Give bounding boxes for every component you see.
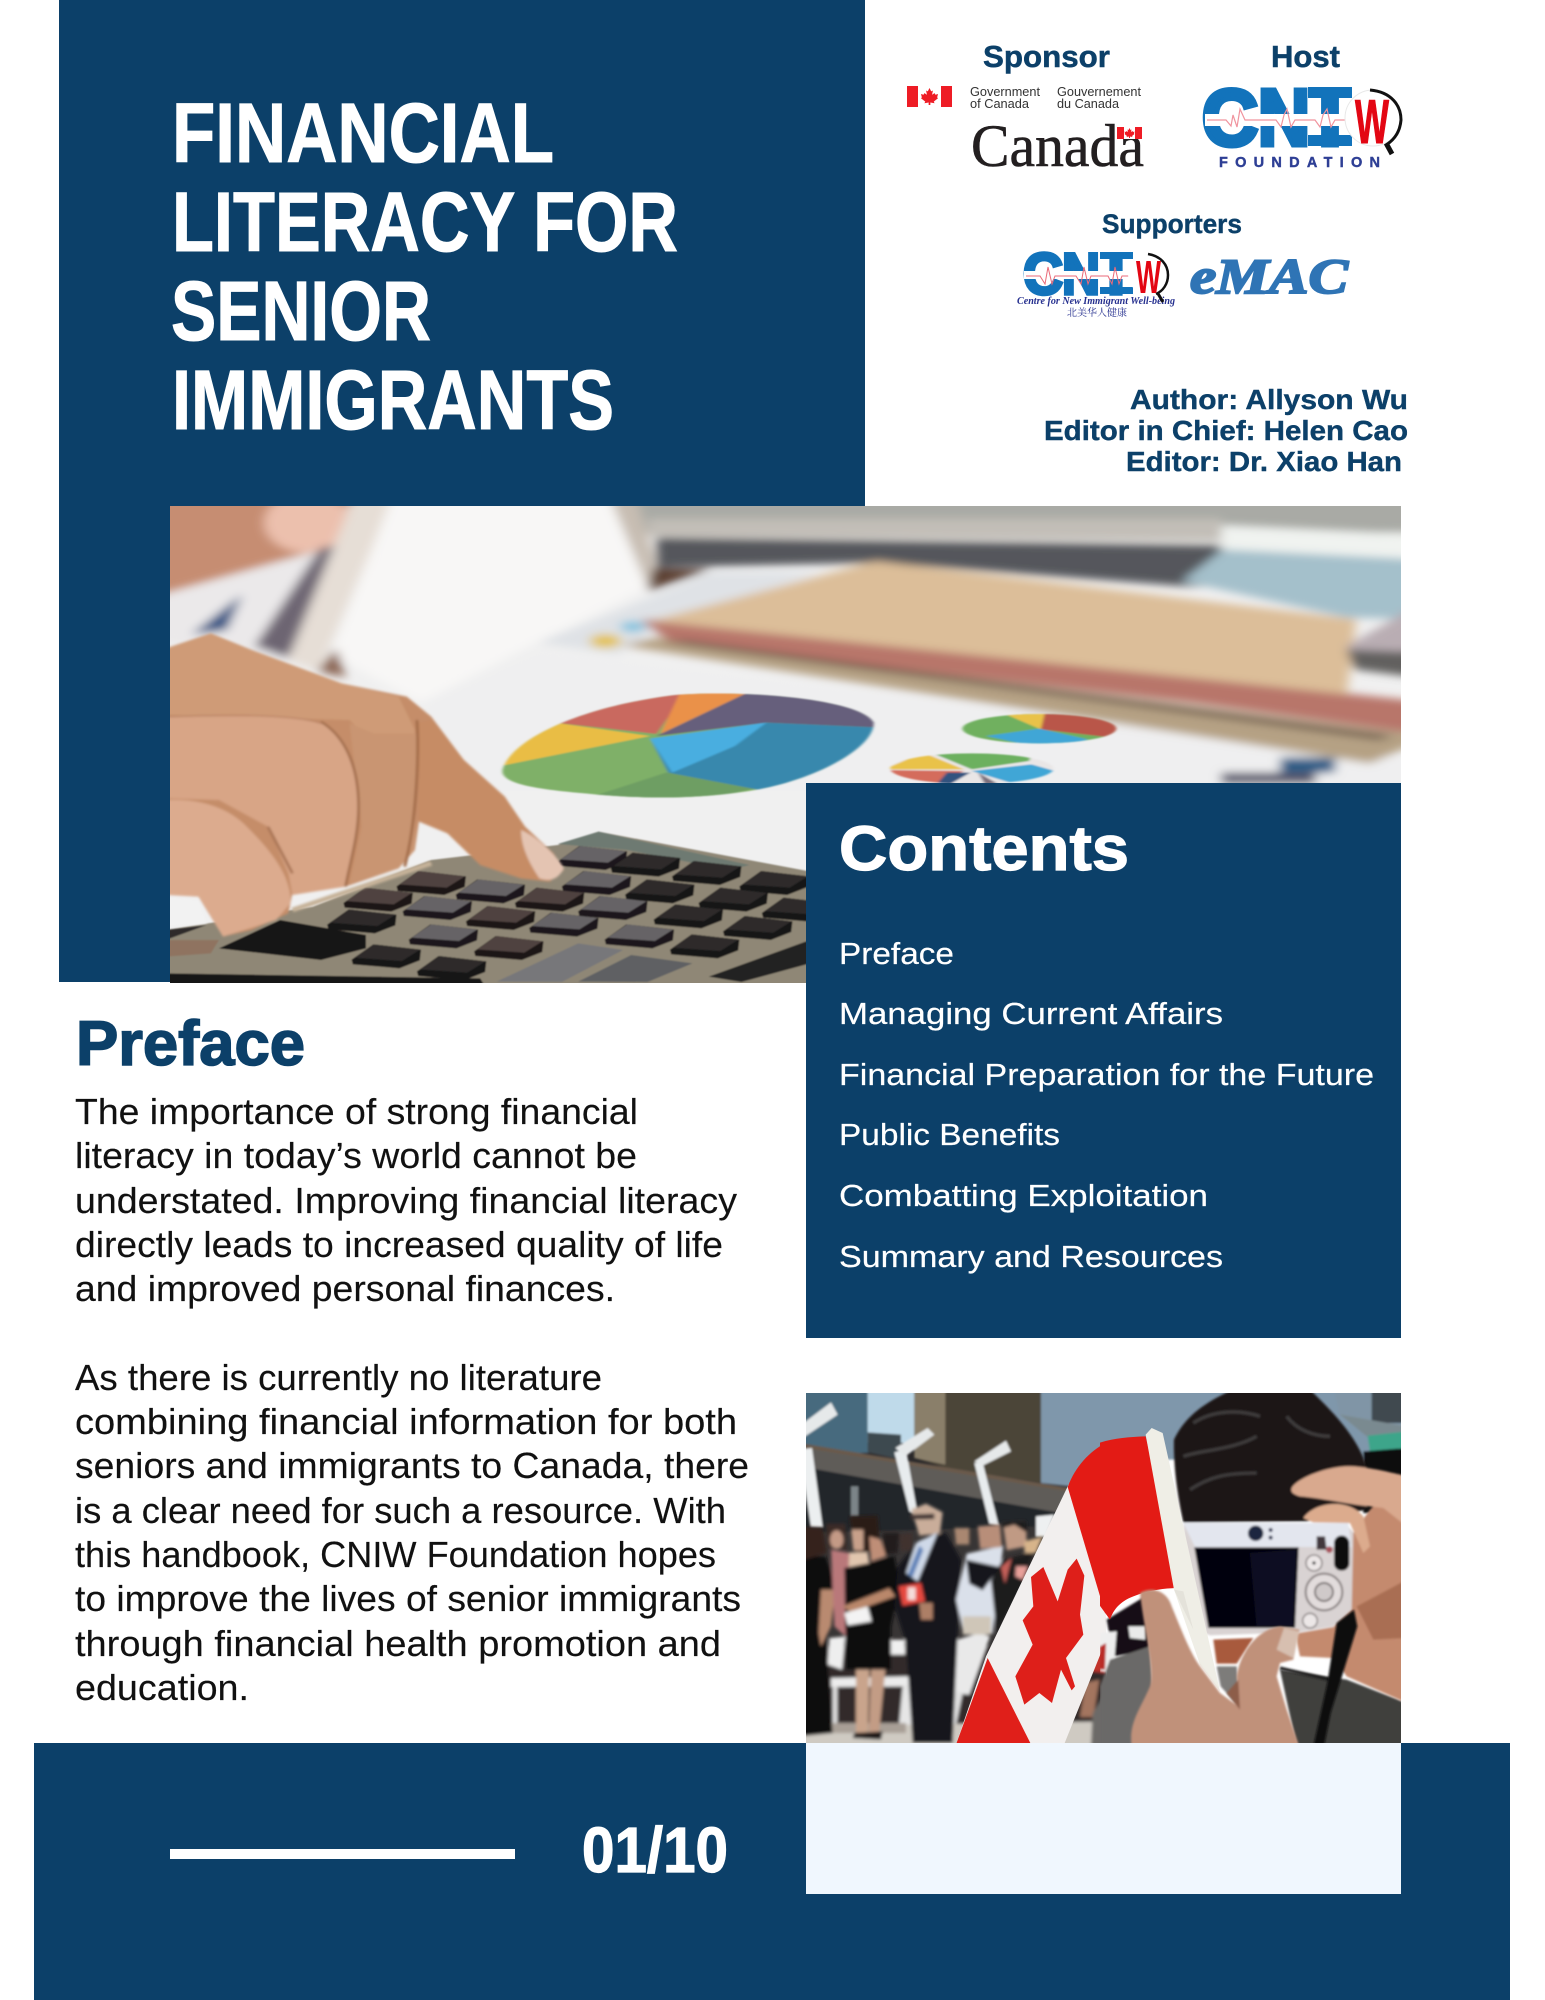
preface body text: through financial health promotion and	[75, 1623, 721, 1664]
credits: author and editors: Author: Allyson Wu	[1130, 384, 1408, 415]
logo: CNIW Centre for New Immigrant Well-being: W	[1136, 251, 1161, 303]
logo: CNIW Foundation: FOUNDATION	[1219, 155, 1380, 171]
people	[799, 1556, 837, 1736]
contents list: Combatting Exploitation	[839, 1178, 1208, 1213]
panel: top navy title block	[59, 0, 865, 982]
chairs and ground	[799, 1646, 1113, 1746]
preface body text: seniors and immigrants to Canada, there	[75, 1445, 749, 1486]
title	[171, 86, 678, 447]
logo: Government of Canada: Gouvernement	[1057, 84, 1141, 99]
preface body text: and improved personal finances.	[75, 1268, 615, 1309]
heading: supporters: Supporters	[1102, 209, 1242, 239]
logo: Government of Canada: du Canada	[1057, 96, 1120, 111]
logo: Government of Canada: Canada	[971, 113, 1144, 179]
pale blue box	[806, 1743, 1401, 1894]
right hand	[1295, 1476, 1407, 1703]
preface body text: understated. Improving financial literacy	[75, 1180, 737, 1221]
flag pole	[1146, 1428, 1220, 1691]
preface body text: literacy in today’s world cannot be	[75, 1135, 637, 1176]
preface body text: is a clear need for such a resource. With	[75, 1490, 726, 1531]
small pie charts	[888, 713, 1118, 783]
preface body text: education.	[75, 1667, 249, 1708]
preface body text: As there is currently no literature	[75, 1357, 602, 1398]
title: LITERACY FOR	[172, 175, 678, 269]
page number: 01/10	[582, 1814, 728, 1886]
credits: author and editors: Editor: Dr. Xiao Han	[1126, 446, 1402, 477]
pie chart large	[500, 692, 876, 798]
logo: CNIW Foundation: I	[1318, 73, 1342, 162]
logo: eMAC: eMAC	[1190, 248, 1349, 304]
logo: Government of Canada: of Canada	[970, 96, 1030, 111]
preface body text	[75, 1091, 749, 1708]
heading: host: Host	[1271, 39, 1340, 74]
logo: CNIW Foundation: N	[1258, 73, 1310, 162]
footer: navy band	[34, 1743, 1510, 2000]
credits: author and editors	[1044, 384, 1408, 477]
calculator	[166, 832, 831, 987]
flag maple leaf	[1015, 1559, 1084, 1705]
logo: CNIW Centre for New Immigrant Well-being: Centre for New Immigrant Well-being	[1017, 296, 1175, 307]
logo: CNIW Centre for New Immigrant Well-being: C	[1023, 242, 1063, 307]
photo: hand on calculator with pie charts	[139, 493, 1433, 987]
logo: CNIW Centre for New Immigrant Well-being: 北美华人健康	[1067, 304, 1127, 319]
contents list	[839, 936, 1374, 1274]
flag upper red band	[1068, 1441, 1111, 1616]
heading: preface: Preface	[76, 1009, 305, 1079]
hair	[1174, 1386, 1368, 1522]
logo: CNIW Foundation: C	[1202, 73, 1258, 162]
preface body text: to improve the lives of senior immigrants	[75, 1578, 741, 1619]
heading: contents: Contents	[839, 814, 1129, 884]
hand	[166, 633, 564, 937]
contents list: Public Benefits	[839, 1117, 1060, 1152]
contents list: Financial Preparation for the Future	[839, 1057, 1374, 1092]
logo: CNIW Foundation: W	[1355, 88, 1389, 157]
title: IMMIGRANTS	[172, 353, 614, 447]
flag lower red band	[955, 1658, 1032, 1746]
heading: sponsor: Sponsor	[983, 39, 1110, 74]
credits: author and editors: Editor in Chief: Helen Cao	[1044, 415, 1408, 446]
logo: CNIW Centre for New Immigrant Well-being: I	[1107, 242, 1125, 307]
preface body text: directly leads to increased quality of life	[75, 1224, 723, 1265]
contents list: Summary and Resources	[839, 1239, 1223, 1274]
preface body text: combining financial information for both	[75, 1401, 737, 1442]
photo: Canadian flag and camera at citizenship ceremony	[799, 1386, 1408, 1746]
logo: CNIW Centre for New Immigrant Well-being	[1017, 242, 1175, 319]
flag red end	[1097, 1436, 1181, 1620]
preface body text: The importance of strong financial	[75, 1091, 638, 1132]
hand holding flag	[1131, 1590, 1357, 1746]
logo: Government of Canada: Government	[970, 84, 1040, 99]
flag white field	[955, 1483, 1108, 1746]
panel: contents	[806, 783, 1401, 1338]
logo: CNIW Foundation	[1202, 73, 1401, 171]
logo: CNIW Centre for New Immigrant Well-being: N	[1062, 242, 1100, 307]
logo: Government of Canada	[907, 84, 1144, 179]
contents list: Preface	[839, 936, 954, 971]
preface body text: this handbook, CNIW Foundation hopes	[75, 1534, 716, 1575]
camera body	[1183, 1523, 1354, 1635]
title: SENIOR	[171, 264, 431, 358]
contents list: Managing Current Affairs	[839, 996, 1223, 1031]
title: FINANCIAL	[172, 86, 554, 180]
footer progress line	[170, 1849, 515, 1859]
